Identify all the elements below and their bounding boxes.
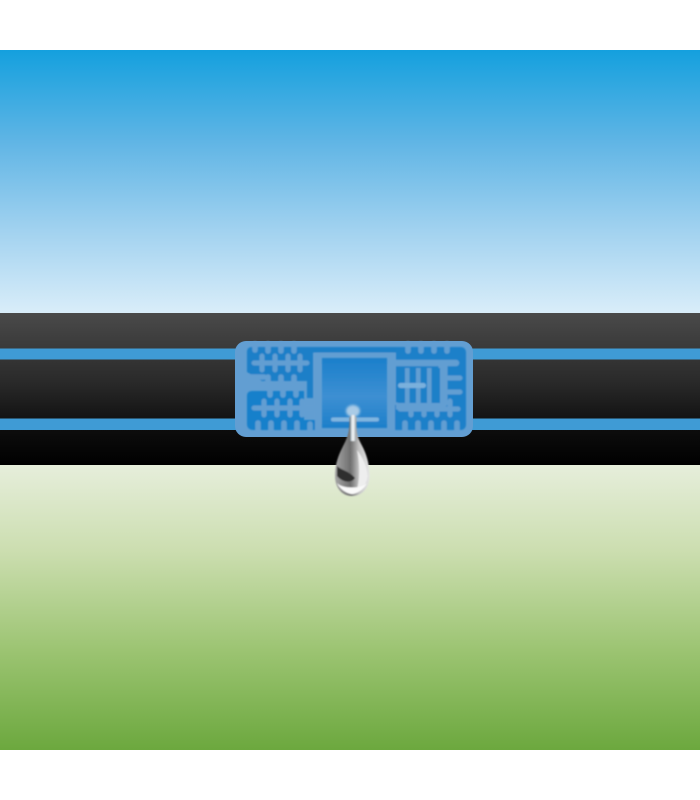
- central outlet chamber: [322, 358, 387, 428]
- emitter body with labyrinth channels: [235, 341, 473, 437]
- light frame around central chamber: [315, 353, 395, 433]
- panel: ground gradient: [0, 465, 700, 750]
- channel: right grid chamber: [398, 368, 440, 403]
- channel: right labyrinth: [395, 344, 466, 433]
- panel: sky gradient: [0, 50, 700, 313]
- icon: water droplet: [335, 405, 370, 496]
- channel: top connector: [312, 347, 402, 352]
- channel: lower left labyrinth: [247, 388, 320, 433]
- drip tube with blue stripes: [0, 313, 700, 465]
- channel: upper left labyrinth: [247, 344, 313, 398]
